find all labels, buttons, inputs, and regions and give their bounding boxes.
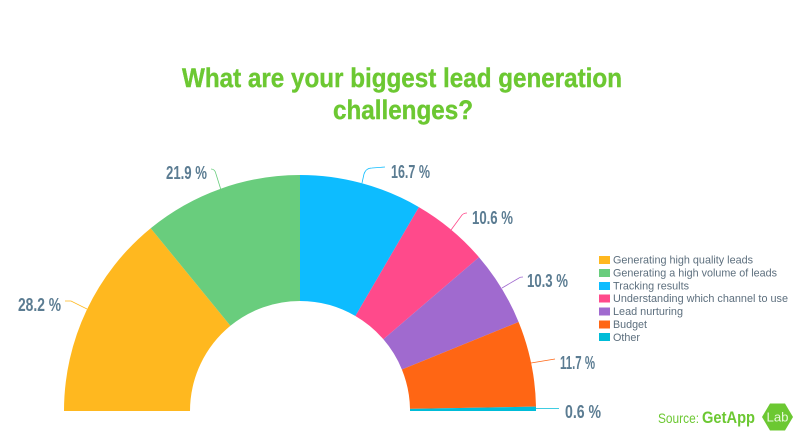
legend item: high quality leads: Generating high quality leads [613,254,753,266]
title: challenges? [333,95,473,125]
segment: lead nurturing [383,257,519,370]
data labels [18,162,601,422]
legend item: budget: Budget [613,319,647,331]
legend [599,254,788,344]
label: 0.6: 0.6 % [565,402,601,422]
leader line: 16.7 [362,167,385,183]
label: 11.7: 11.7 % [560,353,595,373]
leader line: 0.6 [536,408,559,410]
label: 10.3: 10.3 % [527,271,568,291]
legend item: tracking results: Tracking results [613,280,689,292]
segment: budget [402,322,536,409]
segment: generating high quality leads [64,228,230,411]
segment: generating a high volume of leads [151,175,300,326]
label: 21.9: 21.9 % [166,163,207,183]
hexagon badge [762,404,793,430]
legend item: channel: Understanding which channel to use [613,293,788,305]
label: 10.6: 10.6 % [472,208,513,228]
title: What are your biggest lead generation [182,63,622,93]
title [182,63,622,125]
label: 28.2: 28.2 % [18,295,61,315]
GetApp wordmark: GetApp [702,408,755,427]
segment: other [410,407,536,411]
source logo [658,404,793,430]
semi-donut chart [64,175,536,411]
leader line: 10.3 [502,277,523,288]
legend item: high volume: Generating a high volume of leads [613,267,777,279]
badge text: Lab [766,410,789,424]
legend item: other [599,332,640,344]
leader line: 21.9 [211,169,221,190]
leader line: 28.2 [65,301,87,309]
leader line: 11.7 [531,359,555,363]
legend item: budget [599,319,647,331]
legend item: other: Other [613,332,640,344]
legend item: lead nurturing: Lead nurturing [613,306,683,318]
label: 16.7: 16.7 % [391,162,430,182]
leader line: 10.6 [451,213,467,230]
segment: tracking results [300,175,419,316]
segment: understanding which channel to use [355,207,479,339]
source text: Source: [658,411,699,426]
